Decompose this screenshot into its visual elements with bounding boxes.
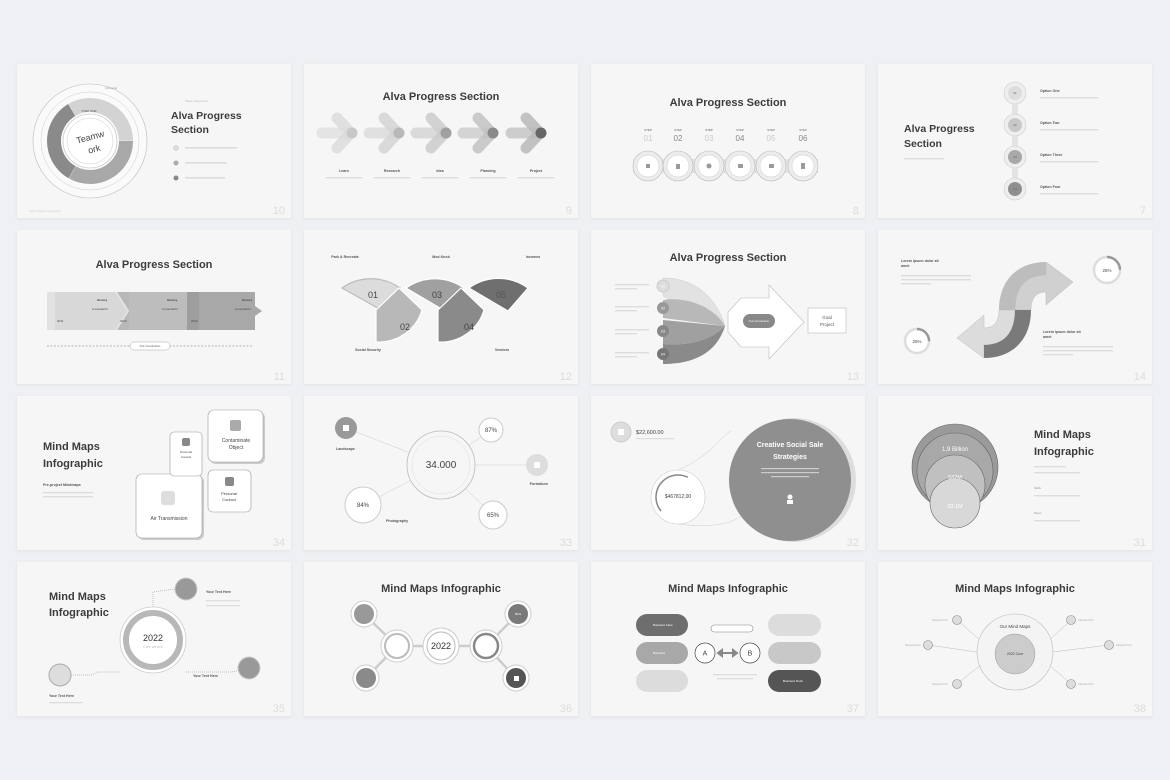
step numbers: STEP (644, 128, 652, 132)
slide 38: our mind maps (878, 562, 1152, 716)
top labels (331, 255, 540, 352)
slide 31: nested circles: 31 (1134, 537, 1146, 549)
nodes: 87% (485, 428, 498, 434)
title (171, 99, 242, 136)
title (1034, 429, 1094, 458)
title: Mind Maps Infographic (668, 583, 788, 595)
slide 9: arrow steps: 9 (566, 205, 572, 217)
core circle: Core service (143, 645, 163, 649)
nested circles chart (912, 424, 998, 528)
petal shapes: 05 (496, 290, 506, 300)
step numbers: STEP (767, 128, 775, 132)
slide 38: our mind maps: Sample Point (932, 682, 948, 686)
slide 37: A B pills: 37 (847, 703, 859, 715)
fan layers: 02 (661, 306, 665, 310)
title (904, 123, 975, 159)
nodes: Your Text Here (49, 694, 74, 698)
nodes: 84% (357, 503, 370, 509)
connectors (928, 620, 1109, 684)
slide 31: nested circles (878, 396, 1152, 550)
text blocks (901, 259, 971, 284)
step numbers: 04 (736, 134, 745, 143)
value top (611, 422, 674, 442)
satellite icons (924, 616, 1114, 688)
top labels: Mod Knob (432, 255, 451, 259)
option circles: 01 (1013, 91, 1017, 95)
donut 25% bottom (905, 329, 929, 353)
nodes: Landscape (336, 447, 355, 451)
option circles: 04 (1013, 187, 1017, 191)
page number: 10 (273, 205, 285, 217)
slide 38: our mind maps: Sample Point (932, 618, 948, 622)
center circle: 34.000 (426, 460, 457, 471)
boxes (136, 410, 265, 540)
step labels: Idea (436, 169, 445, 173)
slide 34: mind maps boxes: Object (229, 445, 244, 451)
value circle: $467812,00 (665, 494, 691, 500)
cycle diagram: Teamw (75, 128, 106, 146)
goal project box (808, 308, 846, 333)
slide 33: 34.000 mind map: 33 (560, 537, 572, 549)
left pills (636, 614, 688, 692)
top labels: Vendors (495, 348, 509, 352)
option labels: Option Four (1040, 185, 1061, 189)
slide 34: mind maps boxes: Air Transmission (151, 516, 188, 522)
petal shapes: 01 (368, 290, 378, 300)
nodes: Your Text Here (193, 674, 218, 678)
title: Alva Progress Section (670, 97, 787, 109)
slide 14: S arrow: Lorem ipsum dolor sit (1043, 330, 1082, 334)
donut 25% top: 25% (1102, 268, 1112, 273)
title: Mind Maps (49, 591, 106, 603)
step labels: Learn (339, 169, 349, 173)
step numbers: STEP (736, 128, 744, 132)
big circle: Creative Social Sale (757, 442, 823, 449)
slide 11: timeline: 11 (274, 371, 285, 383)
step numbers: 01 (644, 134, 653, 143)
list: Basic (1034, 511, 1042, 515)
option labels: Option Three (1040, 153, 1062, 157)
slide 35: 2022 core (17, 562, 291, 716)
value top: $22,600.00 (636, 430, 664, 436)
left text (615, 284, 649, 357)
timeline band: History (242, 298, 253, 302)
slide 38: our mind maps: Sample Point (905, 643, 921, 647)
step labels: Planning (480, 169, 496, 173)
title (43, 441, 103, 497)
timeline band: 2011 (57, 319, 64, 323)
top labels: Incomes (526, 255, 540, 259)
slide 9: arrow steps (304, 64, 578, 218)
option circles: 02 (1013, 123, 1017, 127)
title: Infographic (49, 607, 109, 619)
timeline band (47, 292, 262, 330)
title: Alva Progress (171, 110, 242, 122)
big arrow: Our Conclusion (749, 319, 770, 323)
donut 25% top (1094, 257, 1120, 283)
A and B: A (703, 650, 708, 658)
title: Mind Maps (43, 441, 100, 453)
core circle: 2022 Core (1007, 652, 1023, 656)
option labels (1040, 89, 1098, 194)
slide 34: mind maps boxes: Personal (221, 491, 237, 496)
core circle: 2022 (143, 633, 163, 643)
slide 38: our mind maps: Sample Point (1078, 618, 1094, 622)
list (1034, 466, 1080, 521)
option labels: Option Two (1040, 121, 1060, 125)
big circle: Strategies (773, 454, 807, 461)
nodes: Photography (386, 519, 408, 523)
goal project box: Goal (822, 315, 832, 320)
title: Infographic (1034, 446, 1094, 458)
big arrow (728, 285, 804, 359)
conclusion line (47, 342, 253, 350)
timeline band: History (167, 298, 178, 302)
title: Mind Maps Infographic (955, 583, 1075, 595)
slide 7: options (878, 64, 1152, 218)
slide 14: S arrow (878, 230, 1152, 384)
big circle (729, 418, 856, 542)
timeline band: 2012 (120, 319, 127, 323)
step numbers: 02 (674, 134, 683, 143)
title: Alva Progress Section (96, 259, 213, 271)
slide 11: timeline (17, 230, 291, 384)
option labels: Option One (1040, 89, 1060, 93)
title: Mind Maps (1034, 429, 1091, 441)
A and B: B (748, 650, 753, 658)
slide 32: creative social sale: 32 (847, 537, 859, 549)
slide 34: mind maps boxes: Contaminate (222, 438, 250, 444)
timeline band: A wonderful (235, 307, 251, 311)
right pills: Business Rock (783, 679, 803, 683)
title: Mind Maps Infographic (381, 583, 501, 595)
cycle diagram: STEP ONE (81, 109, 97, 113)
slide 38: our mind maps: Sample Point (1116, 643, 1132, 647)
connectors (71, 589, 249, 675)
option circles: 03 (1013, 155, 1017, 159)
step numbers: STEP (674, 128, 682, 132)
step numbers: 05 (767, 134, 776, 143)
core circle: Our Mind Maps (1000, 624, 1031, 629)
petal shapes (342, 278, 528, 342)
slide 14: S arrow: 14 (1134, 371, 1146, 383)
fan layers: 03 (661, 330, 665, 334)
step labels: Project (530, 169, 543, 173)
right pills (768, 614, 821, 692)
text blocks: amet (901, 264, 910, 268)
slide 35: 2022 core: 35 (273, 703, 285, 715)
core circle (977, 614, 1053, 690)
option circles (1004, 82, 1026, 200)
network (351, 601, 531, 691)
left pills: Business Face (653, 623, 673, 627)
slide 34: mind maps boxes (17, 396, 291, 550)
slide 37: A B pills (591, 562, 865, 716)
slide 12: petals: 12 (560, 371, 572, 383)
slide 34: mind maps boxes: 34 (273, 537, 285, 549)
slide 8: steps 01-06 (591, 64, 865, 218)
cycle diagram: Financial (105, 86, 117, 90)
title: Pre-project Mindmaps (43, 483, 81, 487)
goal project box: Project (820, 322, 835, 327)
slide 34: mind maps boxes: Contact (222, 497, 237, 502)
S-arrow (957, 262, 1073, 358)
slide 34: mind maps boxes: Contact (181, 455, 191, 459)
step numbers: 06 (799, 134, 808, 143)
title: Section (904, 138, 942, 150)
connectors (346, 428, 537, 515)
left pills: Business (653, 651, 666, 655)
timeline band: History (97, 298, 108, 302)
nodes (335, 417, 548, 529)
slide 12: petals (304, 230, 578, 384)
slide 32: creative social sale (591, 396, 865, 550)
slide 13: fan and arrow: 13 (847, 371, 859, 383)
step numbers: 03 (705, 134, 714, 143)
nodes (49, 578, 260, 703)
timeline band: 2013 (191, 319, 198, 323)
text blocks: Lorem ipsum dolor sit (901, 259, 940, 263)
chevron steps (322, 118, 546, 148)
bullet list (174, 146, 237, 180)
slide 33: 34.000 mind map (304, 396, 578, 550)
title: Infographic (43, 458, 103, 470)
step numbers: STEP (799, 128, 807, 132)
fan layers (657, 278, 725, 364)
step numbers: STEP (705, 128, 713, 132)
timeline band: A wonderful (92, 307, 108, 311)
step labels (326, 169, 554, 178)
slide 14: S arrow: amet (1043, 335, 1052, 339)
slide 36: 2022 network: 36 (560, 703, 572, 715)
petal shapes: 03 (432, 290, 442, 300)
step numbers (644, 128, 808, 143)
center circle (407, 431, 475, 499)
conclusion line: Our Conclusion (140, 344, 161, 348)
title: Section (171, 124, 209, 136)
step labels: Research (384, 169, 400, 173)
nodes: Your Text Here (206, 590, 231, 594)
fan layers: 01 (661, 284, 665, 288)
slide 13: fan and arrow (591, 230, 865, 384)
slide 38: our mind maps: 38 (1134, 703, 1146, 715)
top labels: Social Security (355, 348, 381, 352)
cycle diagram (33, 84, 147, 198)
title (49, 591, 109, 619)
list: Skills (1034, 486, 1042, 490)
nested circles chart: 33.1M (947, 504, 963, 510)
fan layers: 04 (661, 352, 665, 356)
A and B (695, 625, 760, 679)
slide 7: options: 7 (1140, 205, 1146, 217)
petal shapes: 04 (464, 322, 474, 332)
icon circles (633, 151, 818, 181)
slide 10: teamwork cycle: 2022 | Maps Infographic (29, 209, 62, 213)
cycle diagram: ork (87, 143, 102, 156)
network: 80% (515, 612, 521, 616)
title: Alva Progress Section (670, 252, 787, 264)
nested circles chart: 532M (948, 475, 962, 481)
slide 38: our mind maps: Sample Point (1078, 682, 1094, 686)
network: 2022 (431, 641, 451, 651)
title: Alva Progress (904, 123, 975, 135)
donut 25% bottom: 25% (912, 339, 922, 344)
slide 10: teamwork cycle (17, 64, 291, 218)
petal shapes: 02 (400, 322, 410, 332)
nested circles chart: 1,9 Billion (942, 447, 968, 453)
timeline band: A wonderful (162, 307, 178, 311)
title: Maps Infographic (185, 99, 209, 103)
nodes: Portraiture (530, 482, 548, 486)
slide 36: 2022 network (304, 562, 578, 716)
nodes: 65% (487, 513, 500, 519)
top labels: Park & Recreate (331, 255, 359, 259)
value circle (647, 431, 741, 528)
core circle (120, 607, 186, 673)
slide 34: mind maps boxes: Personal (180, 450, 192, 454)
slide 8: steps 01-06: 8 (853, 205, 859, 217)
title: Alva Progress Section (383, 91, 500, 103)
